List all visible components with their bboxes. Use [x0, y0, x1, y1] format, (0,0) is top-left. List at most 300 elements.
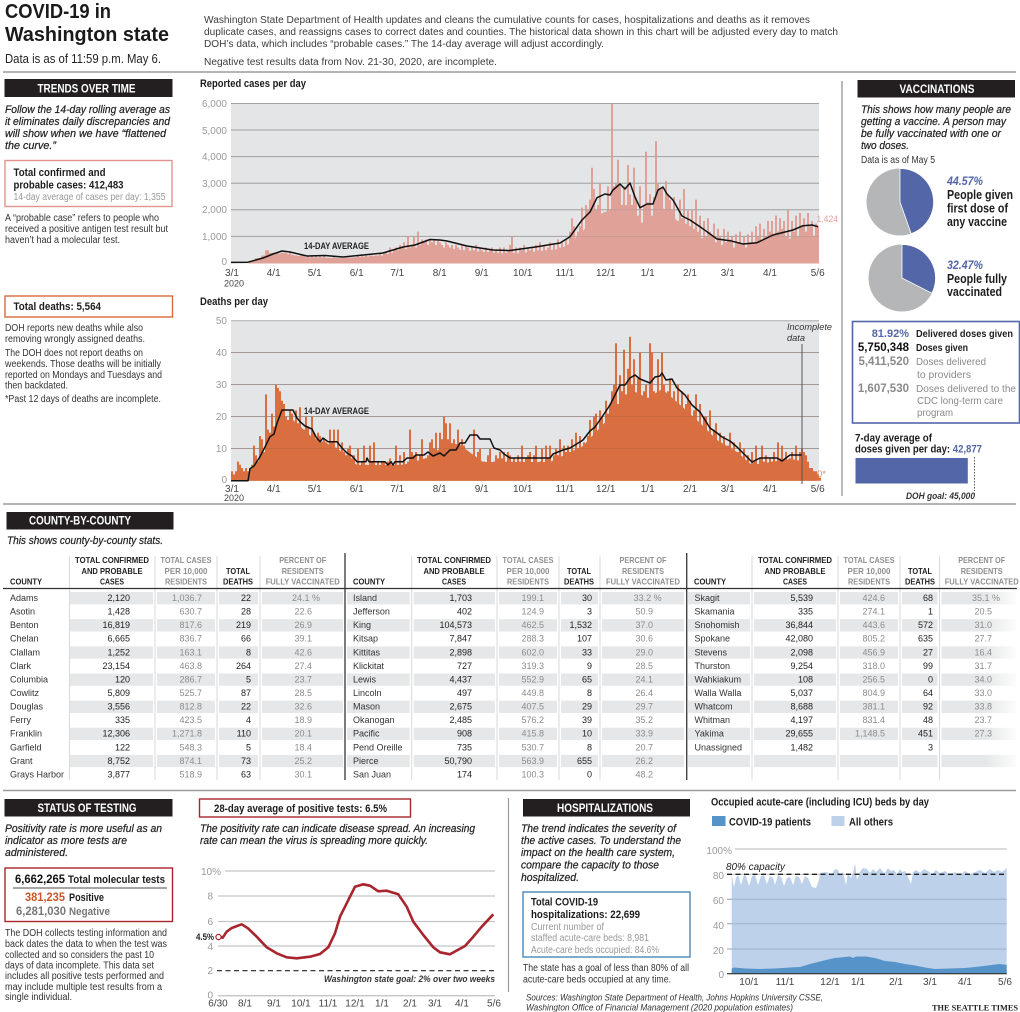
intro text: Washington State Department of Health updates and cleans the cumulative counts for cases, hospitalizations and deaths as it removes [204, 15, 810, 26]
table 3 rows: 5,539 [790, 593, 813, 603]
table 3 rows: 33.8 [974, 702, 992, 712]
heading: status of testing: STATUS OF TESTING [38, 801, 136, 815]
x-axis labels: positivity: 4/1 [455, 999, 469, 1010]
sources [526, 993, 823, 1012]
table 2 rows: 26.4 [635, 688, 653, 698]
annotation: state goal: Washington state goal: 2% over two weeks [324, 974, 495, 985]
x-axis labels: deaths: 4/1 [267, 484, 281, 495]
vaccinations intro text [861, 104, 1011, 166]
x-axis labels: deaths: 3/1 [721, 484, 735, 495]
table 3 rows: 1,148.5 [855, 729, 885, 739]
callout: total hospitalizations: Total COVID-19 [531, 896, 598, 908]
callout: doses: 81.92% [872, 328, 909, 340]
callout: doses: 5,750,348 [858, 342, 910, 354]
table 1 rows: 874.1 [179, 756, 202, 766]
table 3 rows: Wahkiakum [694, 674, 741, 684]
hospitalizations intro text: hospitalized. [521, 872, 579, 884]
annotation: incomplete data [787, 322, 832, 484]
y-axis labels: positivity [201, 867, 221, 1002]
table 2 rows: 29.7 [635, 702, 653, 712]
callout: doses: Doses delivered [916, 356, 986, 368]
table 1 rows: 24.1 % [292, 593, 320, 603]
table 2 rows: Jefferson [353, 607, 390, 617]
table 2 rows: Pend Oreille [353, 742, 403, 752]
vaccinations intro text: two doses. [861, 140, 909, 152]
table 3 rows: 48 [923, 715, 933, 725]
table 1 rows: 3,556 [107, 702, 130, 712]
vaccinations intro text: Data is as of May 5 [861, 155, 935, 166]
table 2 rows [353, 593, 662, 779]
title [5, 1, 169, 46]
table 2 rows: 8 [587, 742, 592, 752]
table 2 header [353, 555, 680, 586]
table 3 header: TOTAL CONFIRMED [758, 555, 832, 565]
x-axis labels: cases: 7/1 [390, 268, 405, 279]
table 3 header: COUNTY [694, 576, 726, 586]
table 2 header: COUNTY [353, 576, 385, 586]
y-axis labels: positivity: 2 [207, 966, 213, 977]
x-axis labels: positivity: 2/1 [403, 999, 417, 1010]
table 3 rows: 64 [923, 688, 933, 698]
text: testing notes: The DOH collects testing information and [5, 928, 167, 939]
legend [712, 816, 893, 828]
table 2 rows: 33.2 % [634, 593, 662, 603]
table 3 rows: Unassigned [694, 742, 742, 752]
table 2 rows: 497 [457, 688, 472, 698]
table 3 rows: 36,844 [785, 620, 813, 630]
heading: trends over time: TRENDS OVER TIME [38, 82, 136, 96]
table 1 rows: 87 [241, 688, 251, 698]
table 3 rows: 9,254 [790, 661, 813, 671]
table 1 rows: 1,271.8 [172, 729, 202, 739]
table 3 rows: 831.4 [862, 715, 885, 725]
x-axis labels: positivity: 6/30 [208, 999, 228, 1010]
table 1 rows: 525.7 [179, 688, 202, 698]
x-axis labels: positivity: 5/6 [487, 999, 501, 1010]
text: state goal: The state has a goal of less than 80% of all [523, 963, 689, 974]
table 1 header: PER 10,000 [164, 566, 208, 576]
table 3 rows: 805.2 [862, 634, 885, 644]
x-axis labels: cases: 5/6 [811, 268, 825, 279]
table 2 rows: Mason [353, 702, 380, 712]
text: testing notes: single individual. [5, 992, 72, 1003]
table 3 rows: 23.7 [974, 715, 992, 725]
text: state goal [523, 963, 689, 986]
table 1 rows: 18.4 [294, 742, 312, 752]
table 1 rows: 163.1 [179, 647, 202, 657]
text: positivity explanation: The positivity rate can indicate disease spread. An increasing [200, 823, 476, 835]
label: fully vaccinated: vaccinated [947, 285, 1002, 299]
panel: vaccinations [852, 80, 1020, 501]
table 3 header [694, 555, 1019, 586]
table 3 header: RESIDENTS [961, 566, 1003, 576]
table 2 rows: 2,898 [449, 647, 472, 657]
table 2 rows: 2,675 [449, 702, 472, 712]
callout: doses: CDC long-term care [917, 395, 1003, 407]
table 2 rows: 727 [457, 661, 472, 671]
annotation: incomplete data: data [787, 333, 805, 343]
callout: total tests: Positive [69, 892, 104, 904]
table 3 rows: 0 [928, 674, 933, 684]
x-axis labels: deaths: 9/1 [475, 484, 489, 495]
table 1 rows: 6,665 [107, 634, 130, 644]
table 2 rows: Pacific [353, 729, 380, 739]
pie chart: fully vaccinated [868, 244, 936, 312]
table 3 rows: 99 [923, 661, 933, 671]
table 1 rows: Columbia [10, 674, 48, 684]
line: 14-day average of deaths [231, 373, 802, 481]
table 1 rows: Asotin [10, 607, 35, 617]
text: probable case note: haven’t had a molecular test. [5, 235, 120, 246]
table 2 rows: Kitsap [353, 634, 378, 644]
table 1 rows: 836.7 [179, 634, 202, 644]
table 1 rows: 18.9 [294, 715, 312, 725]
heading: vaccinations [858, 80, 1015, 98]
table 3 rows: 42,080 [785, 634, 813, 644]
table 3 rows: Whitman [694, 715, 730, 725]
table 3 rows: 31.7 [974, 661, 992, 671]
table 1 rows: Clark [10, 661, 32, 671]
trends intro text: will show when we have “flattened [5, 128, 167, 140]
table 2 rows: 3 [587, 607, 592, 617]
table 1 rows: 16,819 [102, 620, 130, 630]
table 2 rows: 26.2 [635, 756, 653, 766]
table 2 rows: 28.5 [635, 661, 653, 671]
callout: total cases: 14-day average of cases per day: 1,355 [14, 192, 166, 203]
heading: status of testing [4, 799, 172, 816]
x-axis labels: cases: 3/1 [225, 268, 239, 279]
vaccinations intro text: getting a vaccine. A person may [861, 116, 1007, 128]
hospitalizations intro text: the active cases. To understand the [521, 835, 681, 847]
table 3 rows: 27.3 [974, 729, 992, 739]
table 3 rows: Skagit [694, 593, 720, 603]
table 1 rows: 66 [241, 634, 251, 644]
table 1 rows: 28.5 [294, 688, 312, 698]
table 2 rows: Okanogan [353, 715, 395, 725]
callout: 28-day average: 28-day average of positive tests: 6.5% [214, 803, 387, 815]
callout: total tests: 6,281,030 [16, 906, 66, 918]
text: deaths notes: reported on Mondays and Tuesdays and [5, 370, 162, 381]
text: probable case note: received a positive antigen test result but [5, 224, 168, 235]
table 1 rows: 63 [241, 769, 251, 779]
table 3 rows: Skamania [694, 607, 735, 617]
table 3 rows: 1 [928, 607, 933, 617]
table 2 rows: 124.9 [521, 607, 544, 617]
table 3 rows: Thurston [694, 661, 730, 671]
table 2 rows: 30.6 [635, 634, 653, 644]
x-axis labels: positivity: 11/1 [319, 999, 338, 1010]
table 1 rows: 548.3 [179, 742, 202, 752]
pie chart: first dose [866, 168, 934, 236]
text: positivity explanation [200, 823, 476, 847]
table 1 rows: 4 [246, 715, 251, 725]
y-axis labels: positivity: 8 [207, 892, 213, 902]
table 1 header: RESIDENTS [282, 566, 324, 576]
text: testing notes [5, 928, 167, 1003]
table 1 rows: 122 [115, 742, 130, 752]
text: testing notes: includes all positive tests performed and [5, 971, 164, 982]
y-axis labels: beds: 0 [718, 970, 724, 981]
x-axis labels: deaths: 6/1 [350, 484, 364, 495]
text: testing notes: may include multiple test results from a [5, 982, 162, 993]
x-axis labels: deaths: 10/1 [513, 484, 533, 495]
x-axis labels: beds: 12/1 [820, 977, 840, 988]
y-axis labels: positivity: 4 [207, 942, 213, 953]
county intro text: This shows county-by-county stats. [7, 535, 163, 547]
table 2 header: RESIDENTS [622, 566, 664, 576]
x-axis labels: deaths: 8/1 [433, 484, 447, 495]
table 2 rows: Island [353, 593, 377, 603]
sources: Sources: Washington State Department of Health, Johns Hopkins University CSSE, [526, 993, 823, 1003]
table 2 header: RESIDENTS [507, 576, 549, 586]
table 1 rows: 630.7 [179, 607, 202, 617]
chart: occupied beds [706, 846, 1012, 988]
y-axis labels: cases: 2,000 [202, 205, 227, 216]
table 1 rows: 286.7 [179, 674, 202, 684]
y-axis labels: deaths: 0 [221, 475, 227, 486]
table 2 rows: 449.8 [521, 688, 544, 698]
y-axis labels: cases: 1,000 [202, 232, 227, 243]
table 3 rows: 3 [928, 742, 933, 752]
table 1 rows: 30.1 [294, 769, 312, 779]
label: latest deaths value: 0* [817, 469, 826, 480]
label: 14-day average: 14-DAY AVERAGE [304, 406, 369, 416]
callout: total tests: 381,235 [25, 892, 66, 904]
table 1 header: AND PROBABLE [82, 566, 143, 576]
y-axis labels: cases: 4,000 [202, 152, 227, 163]
table 2 rows: 9 [587, 661, 592, 671]
table 1 rows: 20.1 [294, 729, 312, 739]
heading: vaccinations: VACCINATIONS [900, 82, 974, 96]
label: first dose: first dose of [947, 202, 1009, 216]
table 2 rows: 65 [582, 674, 592, 684]
annotation: incomplete data: Incomplete [787, 322, 832, 332]
x-axis labels: deaths: 3/1 [225, 484, 239, 495]
y-axis labels: cases: 0 [221, 257, 227, 268]
table 1 rows: 1,036.7 [172, 593, 202, 603]
text: testing notes: back dates the data to when the test was [5, 939, 167, 950]
x-axis labels: cases: 3/1 [721, 268, 735, 279]
chart: reported cases per day [202, 99, 838, 288]
table 3 header: PER 10,000 [848, 566, 891, 576]
callout: total deaths [5, 296, 172, 317]
trends intro text: it eliminates daily discrepancies and [5, 116, 171, 128]
y-axis labels: deaths: 50 [216, 316, 227, 327]
callout: 28-day average [200, 799, 410, 817]
table 1 rows [10, 593, 320, 779]
table 3 rows: Walla Walla [694, 688, 741, 698]
text: deaths notes: The DOH does not report deaths on [5, 348, 143, 359]
table 2 rows: Kittitas [353, 647, 381, 657]
table stripes [3, 553, 1020, 780]
table 1 rows: 463.8 [179, 661, 202, 671]
x-axis labels: deaths: 2020 [224, 493, 244, 503]
table 3 rows: 1,482 [790, 742, 813, 752]
table 3 rows: 4,197 [790, 715, 813, 725]
text: probable case note [5, 213, 168, 246]
table 1 rows: 22.6 [294, 607, 312, 617]
table 2 rows: 1,532 [569, 620, 592, 630]
trends intro text: Follow the 14-day rolling average as [5, 104, 170, 116]
heading: occupied beds: Occupied acute-care (including ICU) beds by day [711, 796, 930, 808]
y-axis labels: deaths: 40 [216, 348, 227, 359]
callout: doses [852, 322, 1020, 423]
callout: total tests: 6,662,265 [15, 874, 66, 886]
callout: total tests: Total molecular tests [68, 874, 165, 886]
vaccinations intro text: be fully vaccinated with one or [861, 128, 1002, 140]
table 2 rows: 602.0 [521, 647, 544, 657]
table 3 rows: Snohomish [694, 620, 740, 630]
table 2 rows: 20.7 [635, 742, 653, 752]
table 3 rows: 256.5 [862, 674, 885, 684]
table 2 header: PERCENT OF [620, 555, 666, 565]
table 2 rows: 37.0 [635, 620, 653, 630]
x-axis labels: positivity: 9/1 [267, 999, 281, 1010]
bar chart: 7-day average of doses: doses given per day: 42,877 [855, 444, 982, 456]
table 1 rows: 23.7 [294, 674, 312, 684]
table 2 rows: 30 [582, 593, 592, 603]
table 1 rows: 518.9 [179, 769, 202, 779]
callout: doses: Doses given [916, 342, 968, 354]
table 2 rows: 563.9 [521, 756, 544, 766]
table 2 rows: King [353, 620, 371, 630]
text: deaths notes: then backdated. [5, 380, 68, 392]
table 2 header: FULLY VACCINATED [606, 576, 680, 586]
data date note: Data is as of 11:59 p.m. May 6. [5, 52, 161, 66]
hospitalizations intro text: The trend indicates the severity of [521, 823, 677, 835]
x-axis labels: cases: 4/1 [763, 268, 777, 279]
table 3 rows: Whatcom [694, 702, 733, 712]
table 1 header: TOTAL CASES [160, 555, 212, 565]
table 2 rows: 33.9 [635, 729, 653, 739]
hospitalizations intro text: compare the capacity to those [521, 860, 659, 872]
x-axis labels: cases: 4/1 [267, 268, 281, 279]
table 2 header: DEATHS [564, 576, 594, 586]
table 2 rows: 0 [587, 769, 592, 779]
table 1 rows: 8 [246, 647, 251, 657]
table 1 rows: 5 [246, 742, 251, 752]
table 1 rows: 2,120 [107, 593, 130, 603]
table 3 rows: Spokane [694, 634, 730, 644]
heading: reported cases per day: Reported cases per day [200, 78, 307, 90]
callout: doses: 1,607,530 [858, 383, 909, 395]
callout: total hospitalizations [523, 892, 690, 957]
table 2 rows: 39 [582, 715, 592, 725]
callout: total hospitalizations: staffed acute-care beds: 8,981 [531, 933, 649, 944]
table 3 rows: 2,098 [790, 647, 813, 657]
table 1 rows: 22 [241, 593, 251, 603]
table 2 rows: 10 [582, 729, 592, 739]
label: first dose [946, 174, 1013, 229]
callout: total hospitalizations: Acute-care beds occupied: 84.6% [531, 945, 659, 956]
table 3 rows: 274.1 [862, 607, 885, 617]
x-axis labels: cases: 1/1 [641, 268, 655, 279]
table 1 rows: Chelan [10, 634, 39, 644]
table 3 rows: 35.1 % [972, 593, 1000, 603]
bar chart: 7-day average of doses: DOH goal: 45,000 [906, 491, 975, 501]
hospitalizations intro text: impact on the health care system, [521, 847, 675, 859]
x-axis labels: beds: 5/6 [998, 977, 1012, 988]
panel: hospitalizations [521, 796, 1012, 988]
text: deaths notes: *Past 12 days of deaths are incomplete. [5, 394, 161, 405]
table 1 rows: 335 [115, 715, 130, 725]
table 3 rows: 635 [918, 634, 933, 644]
line: positivity rate [218, 884, 493, 958]
table 1 rows: 26.9 [294, 620, 312, 630]
callout: doses: program [917, 407, 953, 419]
intro text: Negative test results data from Nov. 21-30, 2020, are incomplete. [204, 57, 497, 68]
table 3 rows: Stevens [694, 647, 728, 657]
x-axis labels: cases: 6/1 [350, 268, 364, 279]
y-axis labels: positivity: 10% [201, 867, 221, 878]
x-axis labels: deaths: 7/1 [390, 484, 405, 495]
x-axis labels: positivity [208, 999, 501, 1010]
callout: doses: Doses delivered to the [916, 383, 1016, 395]
table 1 rows: Garfield [10, 742, 42, 752]
table 2 header: TOTAL CASES [502, 555, 554, 565]
heading: hospitalizations: HOSPITALIZATIONS [557, 801, 653, 815]
bars: daily deaths [231, 337, 821, 481]
testing intro text [5, 823, 162, 859]
label: first dose: 44.57% [946, 174, 983, 188]
x-axis labels: cases [224, 268, 825, 288]
trends intro text [5, 104, 171, 152]
table 3 rows: Yakima [694, 729, 724, 739]
x-axis labels: positivity: 8/1 [238, 999, 252, 1010]
table 3 rows: 68 [923, 593, 933, 603]
panel: county-by-county [3, 512, 1020, 780]
text: positivity explanation: rate can mean the virus is spreading more quickly. [200, 835, 428, 847]
table 2 rows: 174 [457, 769, 472, 779]
area: covid-19 patients [732, 956, 1007, 974]
table 1 rows: 219 [236, 620, 251, 630]
table 2 header: AND PROBABLE [424, 566, 485, 576]
table 3 rows: 456.9 [862, 647, 885, 657]
table 1 rows: 120 [115, 674, 130, 684]
table 2 rows: 415.8 [521, 729, 544, 739]
table 1 rows: Benton [10, 620, 39, 630]
heading: county-by-county: COUNTY-BY-COUNTY [29, 514, 131, 528]
y-axis labels: beds [706, 846, 732, 981]
table 2 rows: 552.9 [521, 674, 544, 684]
text: probable case note: A “probable case” refers to people who [5, 213, 159, 224]
table 1 rows: Adams [10, 593, 39, 603]
table 2 rows: 48.2 [635, 769, 653, 779]
heading: hospitalizations [523, 799, 690, 816]
y-axis labels: deaths: 20 [216, 412, 227, 423]
x-axis labels: beds [739, 977, 1012, 988]
table 2 rows: 107 [577, 634, 592, 644]
y-axis labels: positivity: 0 [207, 990, 213, 1002]
label: fully vaccinated: 32.47% [947, 258, 983, 272]
start point marker: 4.5% [196, 932, 214, 942]
table 1 rows: 39.1 [294, 634, 312, 644]
text: deaths notes: weekends. Those deaths will be initially [4, 359, 161, 370]
callout: total tests [5, 868, 172, 922]
table 2 header: TOTAL CONFIRMED [417, 555, 491, 565]
table 1 header [10, 555, 340, 586]
label: fully vaccinated [947, 258, 1007, 299]
testing intro text: administered. [5, 847, 68, 859]
label: fully vaccinated: People fully [947, 272, 1007, 286]
testing intro text: Positivity rate is more useful as an [5, 823, 162, 835]
table 2 rows: Klickitat [353, 661, 385, 671]
area: all other patients [732, 863, 1007, 974]
table 1 rows: 22 [241, 702, 251, 712]
table 1 rows: 32.6 [294, 702, 312, 712]
table 3 rows: 443.6 [862, 620, 885, 630]
table 1 rows: 1,428 [107, 607, 130, 617]
